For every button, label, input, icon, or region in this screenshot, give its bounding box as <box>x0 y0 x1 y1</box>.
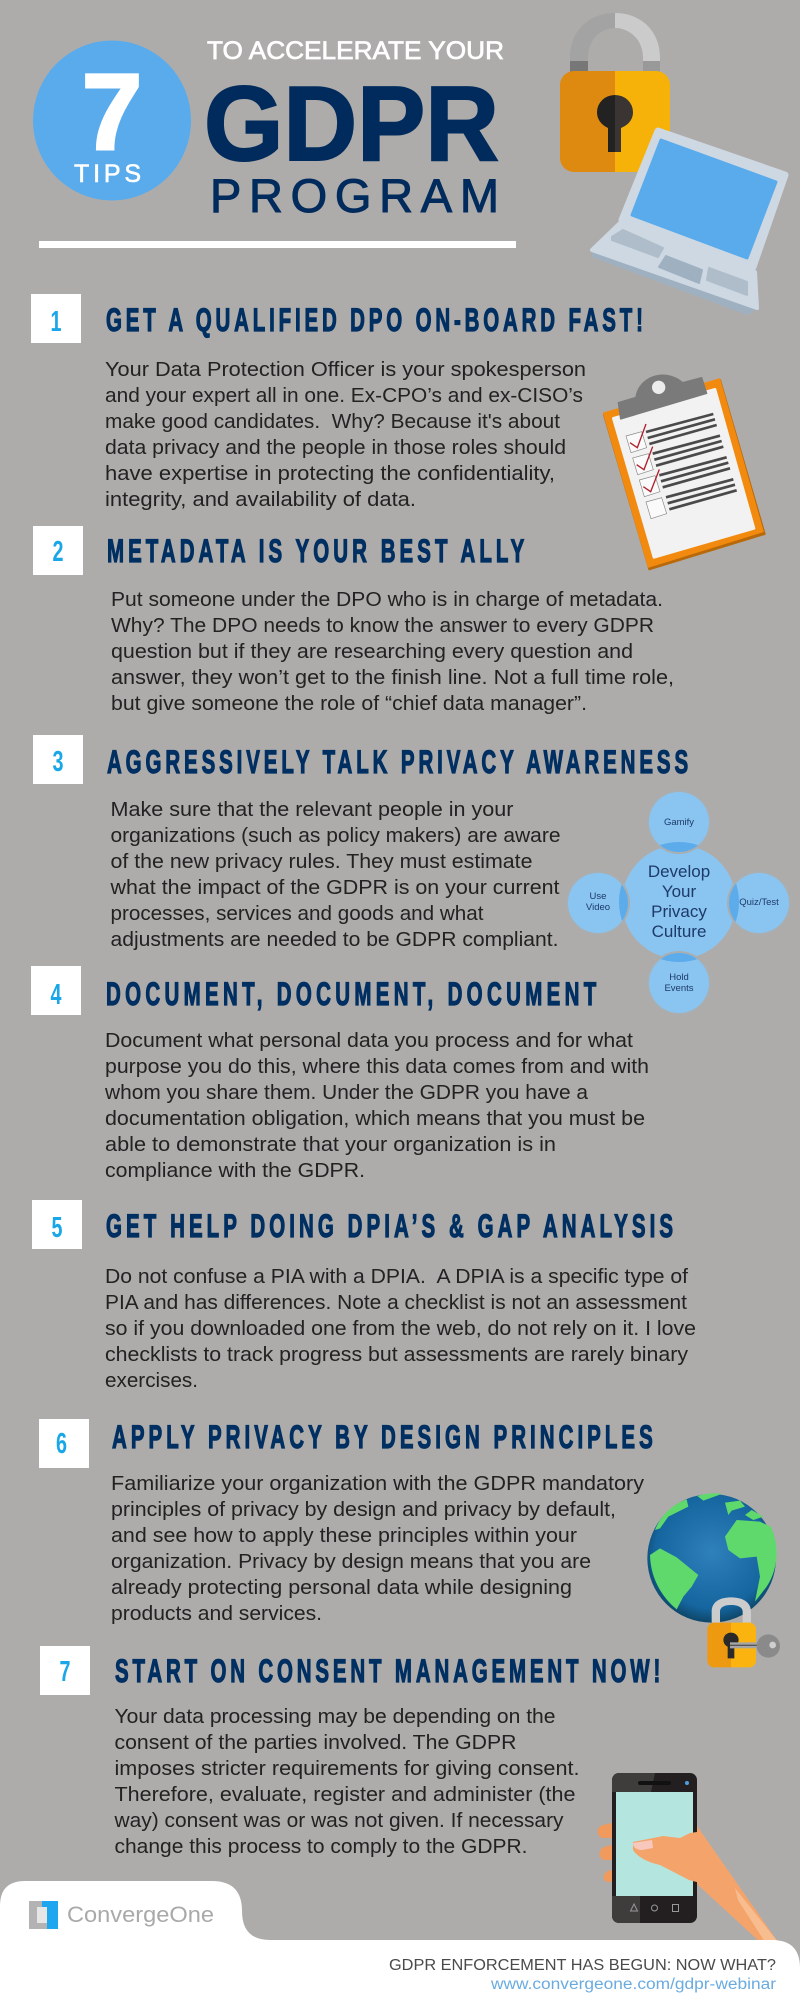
panel: tip 6 <box>39 1419 653 1625</box>
body text 3: what the impact of the GDPR is on your current <box>109 876 560 899</box>
body text 3: processes, services and goods and what <box>110 902 484 925</box>
body text 7: consent of the parties involved. The GDPR <box>114 1731 516 1754</box>
panel: tip 2 <box>33 526 674 715</box>
logo: ConvergeOne: ConvergeOne <box>67 1902 214 1927</box>
body text 7: imposes stricter requirements for giving consent. <box>114 1757 580 1780</box>
panel: tip 1 <box>31 294 643 511</box>
body text 5: Do not confuse a PIA with a DPIA. A DPIA is a specific type of <box>105 1265 688 1288</box>
body text 6 <box>111 1472 645 1625</box>
body text 2: Why? The DPO needs to know the answer to every GDPR <box>111 614 654 637</box>
diagram labels: Culture <box>652 922 706 941</box>
heading 4: DOCUMENT, DOCUMENT, DOCUMENT <box>106 976 597 1012</box>
number box 4: 4 <box>51 979 62 1011</box>
footer band <box>0 1881 800 2000</box>
body text 5: so if you downloaded one from the web, do not rely on it. I love <box>105 1317 696 1340</box>
body text 1: Your Data Protection Officer is your spokesperson <box>105 358 586 381</box>
body text 1: have expertise in protecting the confidentiality, <box>105 462 555 485</box>
diagram labels: Events <box>664 983 694 994</box>
heading 6: APPLY PRIVACY BY DESIGN PRINCIPLES <box>112 1419 653 1455</box>
body text 2 <box>111 588 674 715</box>
icon: hand holding phone <box>598 1773 778 1942</box>
body text 6: and see how to apply these principles within your <box>111 1524 577 1547</box>
diagram labels: Develop <box>648 862 710 881</box>
body text 4: whom you share them. Under the GDPR you have a <box>104 1081 589 1104</box>
body text 7: Therefore, evaluate, register and administer (the <box>114 1783 576 1806</box>
heading 3: AGGRESSIVELY TALK PRIVACY AWARENESS <box>107 744 688 780</box>
icon: globe with padlock and key <box>647 1493 780 1667</box>
diagram labels: Quiz/Test <box>739 897 779 908</box>
body text 3 <box>109 798 561 951</box>
diagram labels: Use <box>590 891 606 902</box>
logo: ConvergeOne <box>29 1901 214 1929</box>
diagram labels: Gamify <box>664 817 694 828</box>
body text 7: way) consent was or was not given. If necessary <box>113 1809 564 1832</box>
body text 1: and your expert all in one. Ex-CPO’s and ex-CISO’s <box>105 384 583 407</box>
icon: padlock <box>560 13 670 172</box>
body text 7: change this process to comply to the GDPR. <box>114 1835 528 1858</box>
body text 4: purpose you do this, where this data comes from and with <box>105 1055 649 1078</box>
number box 2: 2 <box>53 536 63 568</box>
body text 5: checklists to track progress but assessments are rarely binary <box>105 1343 689 1366</box>
body text 3: of the new privacy rules. They must estimate <box>110 850 532 873</box>
badge: 7 tips: TIPS <box>74 160 141 188</box>
footer link: www.convergeone.com/gdpr-webinar <box>490 1976 776 1993</box>
body text 6: products and services. <box>111 1602 322 1625</box>
heading 7: START ON CONSENT MANAGEMENT NOW! <box>115 1653 660 1689</box>
number box 4 <box>31 966 81 1015</box>
body text 2: but give someone the role of “chief data manager”. <box>111 692 587 715</box>
number box 1 <box>31 294 81 343</box>
panel: tip 3 <box>33 735 688 951</box>
body text 6: organization. Privacy by design means that you are <box>111 1550 591 1573</box>
body text 2: question but if they are researching every question and <box>111 640 633 663</box>
diagram labels: Your <box>662 882 697 901</box>
diagram: develop your privacy culture <box>566 790 791 1015</box>
title: program: PROGRAM <box>210 169 499 222</box>
heading 1: GET A QUALIFIED DPO ON-BOARD FAST! <box>106 302 643 338</box>
title: GDPR: GDPR <box>204 65 499 183</box>
number box 7: 7 <box>60 1656 70 1688</box>
icon: clipboard <box>604 375 765 569</box>
body text 3: adjustments are needed to be GDPR compliant. <box>110 928 558 951</box>
body text 6: Familiarize your organization with the GDPR mandatory <box>111 1472 645 1495</box>
footer text: enforcement: GDPR ENFORCEMENT HAS BEGUN: NOW WHAT? <box>389 1957 776 1974</box>
body text 4: documentation obligation, which means that you must be <box>105 1107 645 1130</box>
number box 5 <box>32 1200 82 1249</box>
body text 3: Make sure that the relevant people in your <box>110 798 514 821</box>
heading 5: GET HELP DOING DPIA’S & GAP ANALYSIS <box>106 1208 673 1244</box>
panel: tip 4 <box>31 966 649 1182</box>
number box 3: 3 <box>53 746 63 778</box>
header title block <box>33 37 504 222</box>
heading 2: METADATA IS YOUR BEST ALLY <box>107 533 524 569</box>
body text 1: data privacy and the people in those roles should <box>105 436 566 459</box>
body text 5: PIA and has differences. Note a checklist is not an assessment <box>105 1291 687 1314</box>
body text 7: Your data processing may be depending on the <box>114 1705 556 1728</box>
badge: 7 tips: 7 <box>82 51 142 172</box>
body text 5: exercises. <box>105 1369 198 1392</box>
diagram labels: Video <box>586 902 610 913</box>
badge: 7 tips <box>33 40 191 200</box>
number box 6 <box>39 1419 89 1468</box>
body text 4: compliance with the GDPR. <box>105 1159 365 1182</box>
body text 2: answer, they won’t get to the finish line. Not a full time role, <box>111 666 674 689</box>
panel: tip 7 <box>40 1646 660 1858</box>
diagram labels <box>586 817 779 994</box>
diagram labels: Hold <box>669 972 689 983</box>
number box 2 <box>33 526 83 575</box>
number box 6: 6 <box>56 1428 67 1460</box>
diagram labels: Privacy <box>651 902 707 921</box>
number box 7 <box>40 1646 90 1695</box>
body text 4 <box>104 1029 649 1182</box>
panel: tip 5 <box>32 1200 696 1392</box>
number box 5: 5 <box>52 1212 63 1244</box>
title: to accelerate your: TO ACCELERATE YOUR <box>207 37 504 65</box>
body text 6: principles of privacy by design and privacy by default, <box>111 1498 616 1521</box>
body text 5 <box>105 1265 696 1392</box>
header rule <box>39 241 516 248</box>
body text 1 <box>105 358 586 511</box>
body text 2: Put someone under the DPO who is in charge of metadata. <box>111 588 663 611</box>
body text 4: able to demonstrate that your organization is in <box>105 1133 556 1156</box>
body text 7 <box>113 1705 579 1858</box>
number box 3 <box>33 735 83 784</box>
icon: laptop <box>592 131 785 315</box>
body text 1: integrity, and availability of data. <box>105 488 416 511</box>
body text 3: organizations (such as policy makers) are aware <box>110 824 560 847</box>
body text 6: already protecting personal data while designing <box>111 1576 572 1599</box>
body text 4: Document what personal data you process and for what <box>105 1029 633 1052</box>
number box 1: 1 <box>51 306 62 338</box>
body text 1: make good candidates. Why? Because it's about <box>105 410 560 433</box>
